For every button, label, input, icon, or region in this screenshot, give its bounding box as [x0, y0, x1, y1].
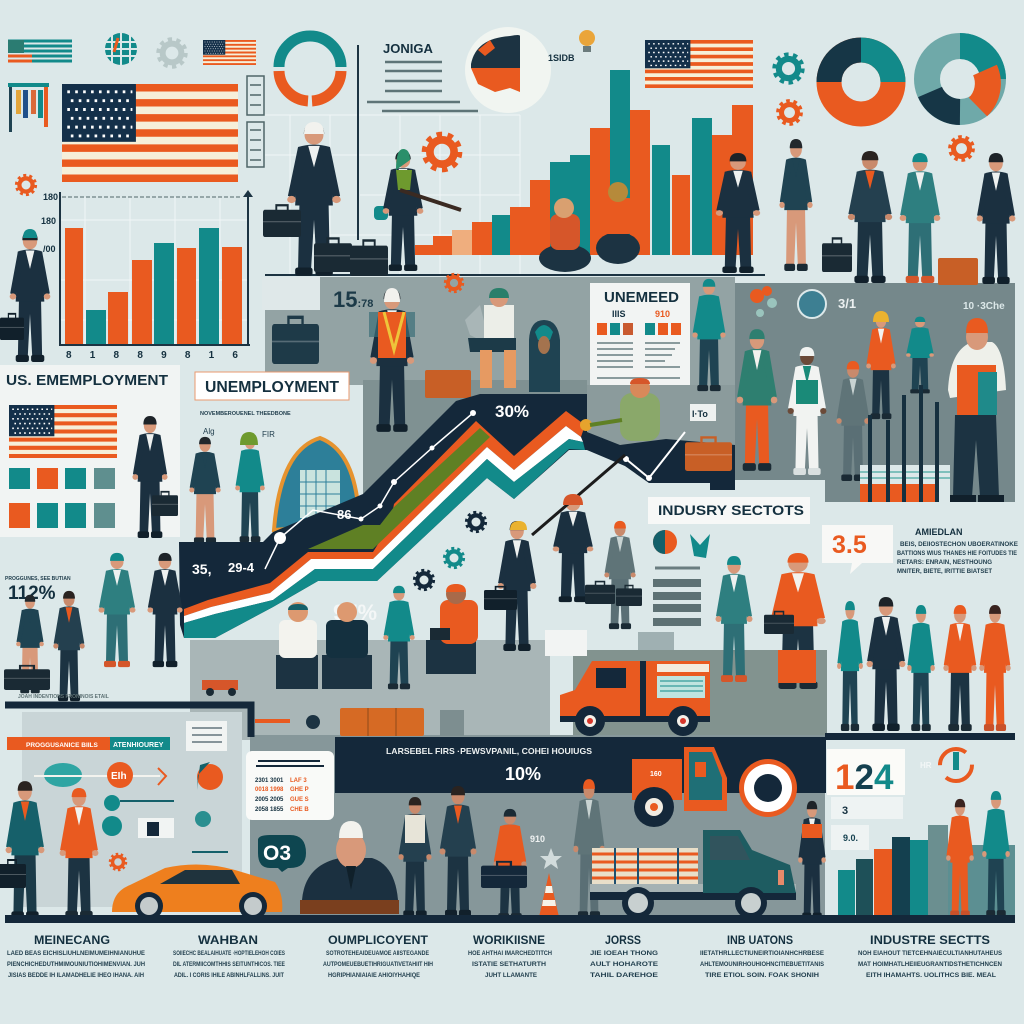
table card: CHE B	[290, 807, 309, 813]
person: orange jacket worker	[866, 311, 896, 419]
person: woman dark dress	[779, 139, 813, 271]
box: 124	[827, 749, 905, 797]
table card: 0018 1998	[255, 787, 284, 793]
pie and list	[653, 530, 710, 626]
column: OUMPLICOYENT: HGRIPHIANIAIAIE AHIOIYHAHIQE	[328, 973, 420, 979]
text block: Amiedlan: MNITER, BIETE, IRITTIE BIATSET	[897, 569, 992, 575]
callout: 3.5: 3.5	[832, 531, 867, 559]
person: woman dark outfit	[692, 279, 726, 391]
column: JORSS: JIE IOEAH THONG	[590, 951, 658, 957]
icon: orange gear center	[424, 134, 460, 170]
icon: orange gear	[778, 101, 801, 124]
person: woman orange dress	[946, 799, 974, 917]
large flag	[62, 84, 238, 182]
stat: 10%: 10%	[505, 764, 541, 784]
table card: GUE S	[290, 797, 309, 803]
person: worker overalls orange	[737, 329, 777, 471]
orange header bar	[7, 737, 170, 750]
toolbox	[938, 258, 978, 285]
icon: orange gear right	[950, 137, 973, 160]
heading: US employment: US. EMEMPLOYMENT	[6, 372, 168, 389]
stacked papers	[545, 630, 587, 656]
person: overalls worker	[98, 553, 136, 667]
orange chest	[340, 708, 424, 736]
person: businessman top	[263, 122, 341, 276]
table card: 2005 2005	[255, 797, 284, 803]
icon: speech bubble 03: O3	[263, 842, 291, 865]
zigzag arrow chart	[179, 394, 735, 638]
illustration: city dome	[274, 438, 358, 530]
text block: Amiedlan: BEIS, DEIIOSTECHON UBOERATINOKE	[900, 542, 1018, 548]
person: woman dark right	[798, 801, 826, 919]
person: worker orange vest	[943, 605, 977, 731]
label: 3 5: 9.0.	[843, 833, 858, 843]
icon: orange gear small	[445, 274, 463, 292]
column: WORIKIISNE: HOE AHTHAI IMARCHEDTITCH	[468, 951, 552, 957]
small icons row	[255, 710, 464, 736]
column: WORIKIISNE: JUHT LLAMANTE	[485, 973, 537, 979]
donut chart: teal	[927, 46, 993, 112]
person: orange shirt man	[60, 788, 98, 918]
heading: UNEMEED: UNEMEED	[604, 289, 679, 306]
table card: 2301 3001	[255, 778, 284, 784]
panel: UNEMEED document	[590, 283, 690, 385]
person: suit man yellow hat	[484, 521, 536, 651]
sitting people group	[276, 584, 478, 689]
top small flag right	[203, 40, 256, 65]
small charts panel right	[750, 286, 1005, 318]
person: woman teal shirt	[907, 605, 935, 731]
orange box	[425, 370, 471, 398]
column: WORIKIISNE: ISTATIE SETHATURTH	[472, 962, 546, 968]
table card: LAF 3	[290, 778, 307, 784]
bar chart: left: 8 1 8 8 9 8 1 6	[66, 350, 238, 361]
column: INB UATONS: AHLTEMOUNIRHOUHIOHNCITIEBUETITANIS	[700, 962, 824, 968]
block: stats 15: 15:78	[333, 287, 373, 312]
column: JORSS	[590, 933, 658, 979]
person: woman orange dress	[979, 605, 1011, 731]
stair bar chart center	[265, 70, 765, 276]
person: suit man grey	[848, 151, 892, 283]
person: standing teal woman	[383, 586, 415, 689]
small table card	[186, 721, 227, 751]
label: 3 5	[831, 797, 903, 850]
icon: speech bubble 03	[258, 835, 306, 872]
person: worker in overalls	[900, 153, 940, 283]
truck: orange cab	[632, 747, 727, 827]
small list icons	[102, 795, 174, 838]
person: man seated white shirt	[465, 288, 516, 388]
heading box: industry sectors	[648, 497, 810, 524]
dark L frame	[5, 705, 251, 737]
briefcases	[314, 238, 388, 276]
icon: gear ring	[739, 759, 797, 817]
text block: Amiedlan	[897, 527, 1018, 575]
top flag center	[645, 40, 753, 88]
person: man at desk	[300, 821, 399, 914]
person: sitting man white	[276, 602, 318, 689]
label: small percent left	[5, 576, 71, 604]
column: INB UATONS: INB UATONS	[727, 933, 793, 947]
label: small percent left: 112%	[8, 583, 56, 604]
row of five people right	[837, 597, 1011, 731]
column: INB UATONS	[700, 933, 824, 979]
top ring chart	[279, 36, 341, 101]
banner text: LARSEBEL FIRS ·PEWSVPANIL, COHEI HOUIUGS	[386, 746, 592, 756]
small label: 1SIDB	[548, 53, 575, 63]
icon: globe	[105, 33, 137, 65]
small charts panel right: 10 ·3Che	[963, 301, 1005, 312]
person: grey worker	[836, 361, 870, 481]
column: INB UATONS: IIETATHRLLECTIUNEIRTIOIANHCHRBESE	[700, 951, 824, 957]
person: suit man right	[977, 153, 1015, 284]
column: MEINECANG: PIENCHICHEDUTHMIMOUNIUTIOHIMENVIAN. JUH	[7, 962, 145, 968]
person: man grey suit	[53, 591, 85, 701]
toolbox dark	[272, 317, 322, 364]
stat: 92%: 97%	[333, 600, 377, 625]
label: Alg: Alg	[203, 427, 215, 436]
person: white hazmat	[788, 347, 826, 475]
column: INDUSTRE SECTTS: EITH IHAMAHTS. UOLITHCS BIE. MEAL	[866, 973, 996, 979]
arrow with EIh	[34, 762, 166, 788]
icon: alert circle	[920, 749, 972, 781]
person: woman teal apron	[982, 791, 1010, 917]
person: woman white top	[16, 595, 44, 693]
person: man with briefcase left	[0, 229, 50, 362]
person: seated worker with rod	[374, 149, 461, 271]
heading: JONIGA	[367, 41, 478, 111]
column: INDUSTRE SECTTS: INDUSTRE SECTTS	[870, 933, 990, 947]
column: OUMPLICOYENT	[323, 933, 433, 979]
person: suit man with briefcase	[132, 416, 178, 538]
person: woman teal dress	[837, 601, 863, 731]
small orange cart	[202, 680, 238, 696]
label 910 and star	[530, 834, 562, 869]
column: MEINECANG: LAED BEAS EICHISLIUHLNEIMUMEIHNIANUHUE	[7, 951, 145, 957]
label 910 and star: 910	[530, 834, 545, 844]
row base line	[825, 733, 1015, 740]
text block: Amiedlan: BATTIONS WIUS THANES HIE FOITUDES TIE	[897, 551, 1017, 557]
icon: alert circle: HR	[920, 761, 932, 770]
person: sitting woman	[539, 198, 591, 272]
icon: orange gear left	[16, 175, 36, 195]
person: woman teal dress	[189, 437, 221, 543]
bar chart: left: /00	[43, 244, 56, 254]
tool rods and bars	[860, 385, 950, 502]
label: fTo: I·To	[692, 409, 708, 419]
small colored bars	[8, 83, 49, 132]
column: INDUSTRE SECTTS: NOH EIAHOUT TIETCEHNAIECULTIANHUTAHEUS	[858, 951, 1002, 957]
callout: 3.5	[822, 525, 893, 574]
icon badges	[414, 512, 486, 590]
orange header bar: ATENHIOUREY	[113, 742, 164, 749]
top small flag left	[8, 40, 72, 65]
stat: 35: 35,	[192, 561, 211, 577]
column: WAHBAN: ADIL. I CORIS IHILE ABINHLFALLINS. JUIT	[174, 973, 284, 979]
person: woman grey top	[585, 521, 642, 629]
person: worker orange vest overalls	[716, 556, 752, 682]
heading: JONIGA: JONIGA	[383, 41, 433, 56]
person: woman orange scarf	[398, 797, 432, 917]
text block: Amiedlan: RETARS: ENRAIN, NESTHOUNG	[897, 560, 992, 566]
heading box: unemployment: UNEMPLOYMENT	[205, 379, 339, 396]
donut chart: dark orange	[829, 50, 893, 114]
truck: flatbed	[590, 830, 796, 919]
person: sitting man dark	[322, 602, 372, 689]
column: JORSS: AULT HOHAROTE	[590, 962, 658, 968]
label: small percent left: PROGGUNES, SEE BUTIAN	[5, 576, 71, 582]
car: orange sports car	[112, 864, 282, 920]
briefcase right	[822, 238, 852, 272]
person: worker grey vest	[573, 779, 605, 919]
icon: camera	[192, 811, 228, 852]
orange header bar: PROGGUSANICE BIILS	[26, 742, 99, 749]
person: orange with laptop	[426, 584, 478, 674]
column: OUMPLICOYENT: AUTPOMEUEBUETIHRIGUATIVETAHIIT HIH	[323, 962, 433, 968]
decorative grid	[60, 115, 520, 345]
panel: US employment	[0, 365, 180, 537]
panel: UNEMEED document: 910	[655, 309, 670, 319]
person: big orange vest worker	[948, 318, 1006, 502]
panel: UNEMEED document: IIIS	[612, 309, 626, 319]
person: suit man red tie	[147, 553, 183, 667]
bar chart lower right	[838, 825, 1015, 915]
person: suit man striding	[716, 153, 760, 273]
traffic cone	[539, 873, 559, 917]
side doc widgets	[247, 76, 264, 167]
column: OUMPLICOYENT: SOTROTEHEAIDEUAMOE AIISTEGANDE	[326, 951, 429, 957]
table card	[246, 751, 334, 820]
column: WORIKIISNE: WORIKIISNE	[473, 933, 545, 947]
column: OUMPLICOYENT: OUMPLICOYENT	[328, 933, 429, 947]
heading box: industry sectors: INDUSRY SECTOTS	[658, 502, 804, 518]
person: sitting worker	[596, 182, 640, 264]
truck: orange van	[560, 661, 710, 736]
column: WORIKIISNE	[468, 933, 552, 979]
column: MEINECANG: JISIAS BEDDE IH ILAMADHELIE IHEO IHANA. AIH	[8, 973, 144, 979]
person: woman green hat	[235, 432, 265, 542]
column: WAHBAN	[173, 933, 285, 979]
truck: orange cab: 160	[650, 771, 662, 778]
label: fTo	[690, 404, 716, 421]
vertical axis line	[357, 45, 359, 240]
icon: head bubble	[197, 762, 223, 790]
heading box: unemployment	[195, 372, 349, 400]
column: INDUSTRE SECTTS: MAT HOIMHATLHEIIEUGRANTIDSTHETICHNCEN	[858, 962, 1002, 968]
icon: teal gear	[774, 54, 802, 82]
stat: 30%: 30%	[495, 402, 529, 421]
column: WAHBAN: SOIIECHC BEALAIHUATE ·HOPTIELEHOH COIES	[173, 951, 285, 957]
column: MEINECANG	[7, 933, 145, 979]
person: orange worker with case	[764, 553, 826, 689]
icon tiles	[9, 468, 115, 528]
table card: 2058 1855	[255, 807, 284, 813]
person: man crossed arms	[440, 786, 476, 917]
person: hooded seated figure	[529, 320, 560, 392]
icon: map circle	[465, 27, 551, 113]
panel flag	[9, 405, 117, 458]
column: JORSS: TAHIL DAREHOE	[590, 973, 658, 979]
table card: GHE P	[290, 787, 309, 793]
person: woman orange with case	[481, 809, 527, 919]
bar chart: left: 180	[41, 216, 56, 226]
text block: Amiedlan: AMIEDLAN	[915, 527, 962, 537]
base line	[5, 915, 1015, 923]
panel: grey backgrounds	[22, 277, 1015, 915]
column: JORSS: JORSS	[605, 933, 641, 947]
case left	[4, 666, 50, 690]
person: worker with rifle	[532, 455, 625, 602]
stat: 29-4: 29-4	[228, 560, 255, 575]
person: man dark suit	[867, 597, 905, 731]
arrow with EIh: EIh	[111, 771, 127, 782]
black banner	[335, 737, 826, 793]
icon: orange gear lower	[110, 854, 126, 870]
column: INB UATONS: TIRE ETIOL SOIN. FOAK SHONIH	[705, 973, 819, 979]
small machine icon	[638, 632, 674, 650]
person: worker orange vest	[369, 288, 415, 432]
column: INDUSTRE SECTTS	[858, 933, 1002, 979]
bar chart: left	[41, 190, 253, 361]
briefcase orange	[685, 437, 732, 471]
column: MEINECANG: MEINECANG	[34, 933, 110, 947]
person: teal worker	[906, 317, 934, 393]
small charts panel right: 3/1	[838, 296, 856, 311]
icon: light bulb	[579, 30, 595, 52]
column: WAHBAN: DIL ATERMIICOMTHHIS SEITUNTHICOS. TIEE	[173, 962, 285, 968]
stat: 86: 86	[337, 507, 351, 522]
box: 124: 124	[835, 758, 894, 797]
column: WAHBAN: WAHBAN	[198, 933, 258, 947]
bar chart: left: 180	[43, 192, 58, 202]
icon: pale gear	[158, 39, 186, 67]
person: teal suit man	[0, 781, 44, 919]
label: FIR: FIR	[262, 430, 275, 439]
small text row: NOVEMBEROUENEL THEEDBONE	[200, 411, 291, 417]
label: 3 5: 3	[842, 805, 848, 817]
strip text: JOAH INDENTIONS FRONINOIS ETAIL	[18, 694, 109, 700]
person: kneeling worker	[580, 378, 660, 441]
